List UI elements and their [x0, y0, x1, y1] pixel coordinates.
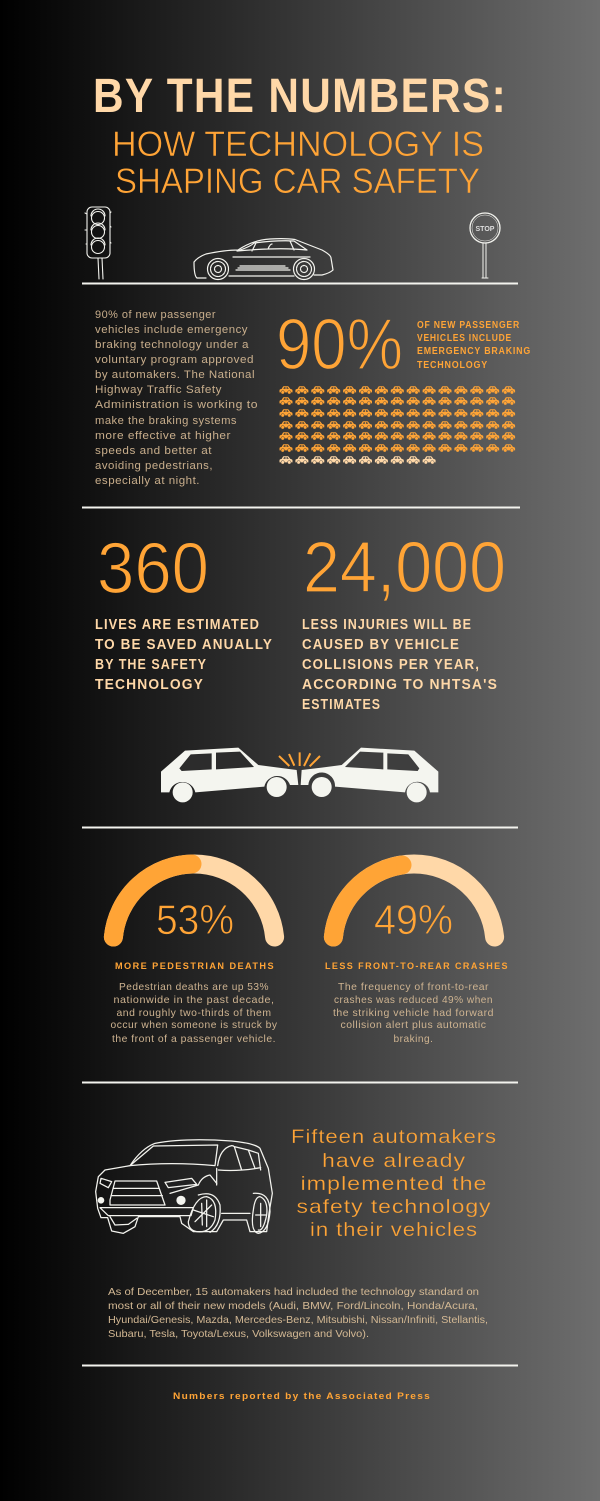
text block: braking paragraph: more effective at higher	[95, 430, 231, 442]
icon: stop sign	[470, 213, 500, 278]
text block: pedestrian deaths: the front of a passenger vehicle.	[112, 1034, 276, 1045]
text block: braking paragraph: Highway Traffic Safety	[95, 384, 222, 396]
text block: front-to-rear crashes: collision alert plus automatic	[340, 1020, 486, 1031]
text block: automakers list: most or all of their new models (Audi, BMW, Ford/Lincoln, Honda/Acura,	[108, 1300, 478, 1312]
callout: fifteen automakers: safety technology	[296, 1196, 492, 1218]
text block: braking paragraph: make the braking systems	[95, 415, 237, 427]
text block: pedestrian deaths	[110, 982, 278, 1045]
text block: front-to-rear crashes: crashes was reduced 49% when	[334, 995, 493, 1006]
callout: fifteen automakers	[291, 1126, 497, 1241]
divider	[82, 282, 518, 284]
text block: lives saved	[95, 617, 273, 693]
text block: lives saved: BY THE SAFETY	[95, 657, 207, 673]
gauge: 49%: 49%	[374, 896, 453, 943]
text block: automakers list	[108, 1286, 488, 1340]
text block: pedestrian deaths: Pedestrian deaths are up 53%	[119, 982, 269, 993]
text block: injuries	[302, 617, 498, 713]
text block: front-to-rear crashes: The frequency of front-to-rear	[338, 982, 489, 993]
footer credit: Numbers reported by the Associated Press	[173, 1391, 431, 1402]
stat: 90%: 90%	[276, 305, 403, 385]
divider	[82, 1082, 518, 1084]
stat label: 90%: TECHNOLOGY	[417, 360, 488, 371]
text block: injuries: LESS INJURIES WILL BE	[302, 617, 472, 633]
gauge: 49%	[333, 864, 495, 943]
subtitle: SHAPING CAR SAFETY	[115, 162, 480, 201]
text block: braking paragraph: 90% of new passenger	[95, 309, 216, 321]
callout: fifteen automakers: implemented the	[300, 1173, 488, 1195]
text block: braking paragraph: speeds and better at	[95, 445, 212, 457]
icon: sedan	[194, 239, 333, 280]
divider	[82, 1364, 518, 1366]
text block: pedestrian deaths: and roughly two-thirds of them	[116, 1008, 272, 1019]
text block: injuries: COLLISIONS PER YEAR,	[302, 657, 480, 673]
text block: front-to-rear crashes: the striking vehicle had forward	[333, 1008, 494, 1019]
divider	[82, 506, 520, 508]
icon: traffic light	[85, 207, 111, 279]
text block: braking paragraph: braking technology under a	[95, 339, 249, 351]
text block: lives saved: TECHNOLOGY	[95, 677, 204, 693]
pictogram: 100 cars	[280, 386, 515, 464]
gauge: 53%	[113, 864, 275, 943]
text block: pedestrian deaths: nationwide in the past decade,	[114, 995, 274, 1006]
text block: lives saved: LIVES ARE ESTIMATED	[95, 617, 260, 633]
text block: braking paragraph: especially at night.	[95, 475, 200, 487]
text block: braking paragraph: vehicles include emergency	[95, 324, 248, 336]
label: front-to-rear crashes: LESS FRONT-TO-REAR CRASHES	[325, 961, 509, 972]
subtitle: HOW TECHNOLOGY IS	[112, 125, 484, 164]
label: pedestrian deaths: MORE PEDESTRIAN DEATHS	[115, 961, 275, 972]
text block: front-to-rear crashes	[333, 982, 494, 1045]
stat label: 90%: OF NEW PASSENGER	[417, 320, 520, 331]
callout: fifteen automakers: Fifteen automakers	[291, 1126, 497, 1148]
stat label: 90%: VEHICLES INCLUDE	[417, 333, 512, 344]
stat label: 90%: EMERGENCY BRAKING	[417, 346, 531, 357]
callout: fifteen automakers: in their vehicles	[310, 1219, 478, 1241]
icon: car collision	[161, 748, 438, 802]
stat: 360: 360	[97, 529, 209, 609]
text block: injuries: ACCORDING TO NHTSA'S	[302, 677, 498, 693]
text block: braking paragraph	[95, 309, 258, 487]
stat: 24,000: 24,000	[303, 528, 506, 608]
text block: automakers list: As of December, 15 automakers had included the technology standard on	[108, 1286, 479, 1298]
text block: automakers list: Subaru, Tesla, Toyota/Lexus, Volkswagen and Volvo).	[108, 1328, 369, 1340]
text block: braking paragraph: by automakers. The National	[95, 369, 255, 381]
gauge: 53%: 53%	[156, 896, 234, 943]
text block: braking paragraph: voluntary program approved	[95, 354, 254, 366]
text block: front-to-rear crashes: braking.	[394, 1034, 434, 1045]
text block: lives saved: TO BE SAVED ANUALLY	[95, 637, 273, 653]
text block: automakers list: Hyundai/Genesis, Mazda, Mercedes-Benz, Mitsubishi, Nissan/Infiniti, Stellantis,	[108, 1314, 488, 1326]
title: BY THE NUMBERS:	[93, 70, 507, 123]
icon: stop sign: STOP	[476, 226, 495, 233]
callout: fifteen automakers: have already	[322, 1150, 466, 1172]
icon: SUV	[96, 1140, 272, 1233]
subtitle	[112, 125, 484, 201]
stat label: 90%	[417, 320, 531, 371]
text block: braking paragraph: avoiding pedestrians,	[95, 460, 213, 472]
text block: braking paragraph: Administration is working to	[95, 399, 258, 411]
text block: injuries: CAUSED BY VEHICLE	[302, 637, 460, 653]
text block: pedestrian deaths: occur when someone is struck by	[110, 1020, 278, 1031]
divider	[82, 826, 518, 828]
text block: injuries: ESTIMATES	[302, 697, 381, 713]
